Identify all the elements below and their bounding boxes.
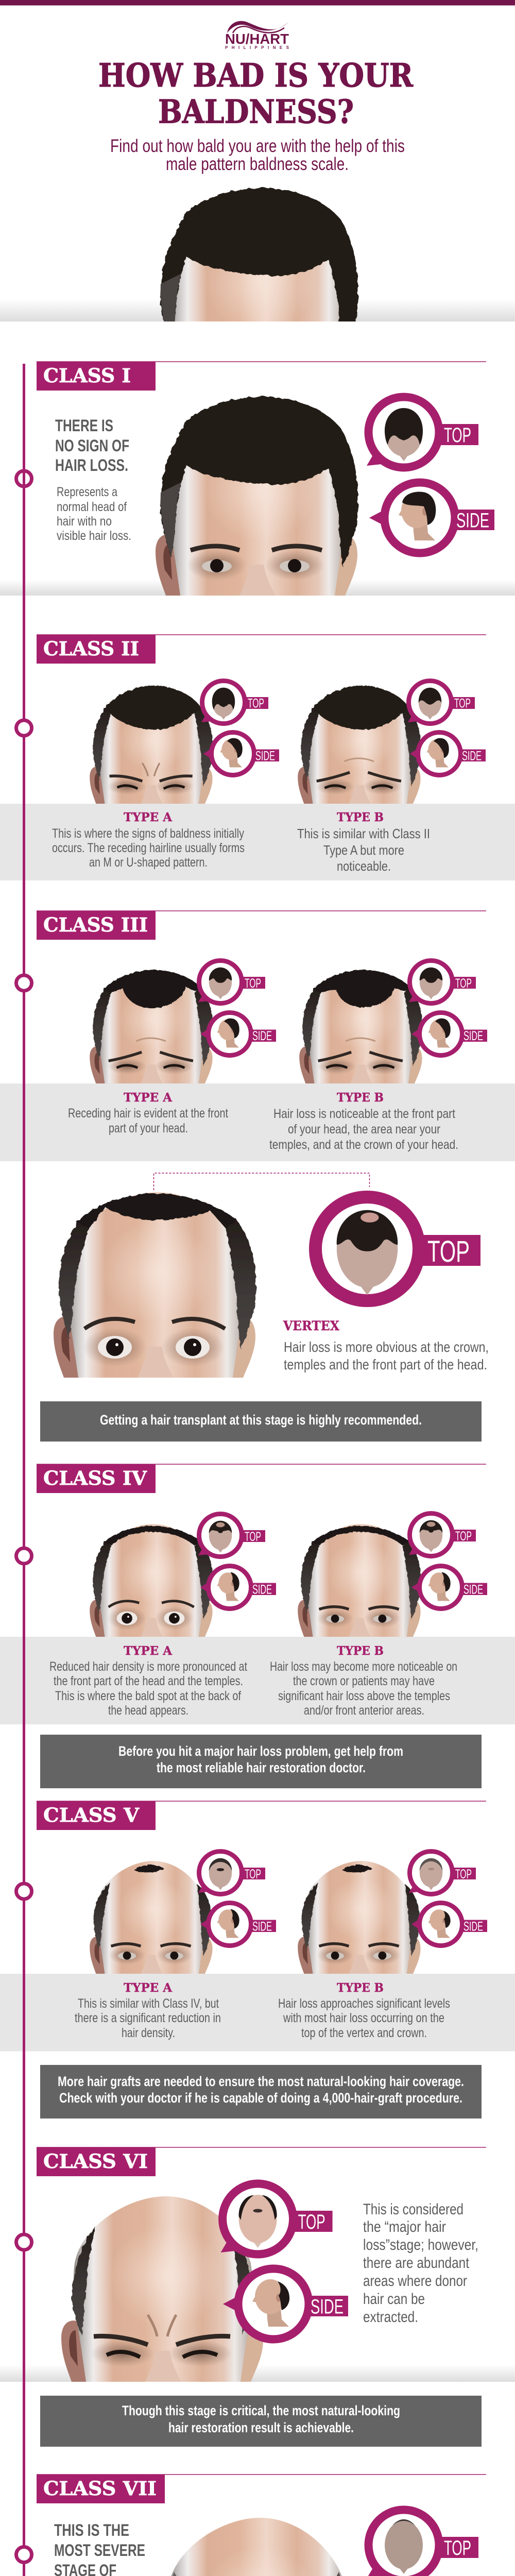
class VII text: MOST SEVERE bbox=[54, 2541, 145, 2560]
class V type B head bbox=[298, 1861, 421, 1974]
class VII head bbox=[0, 2518, 515, 2576]
logo: PHILIPPINES bbox=[225, 45, 289, 50]
class VII heading bbox=[37, 2475, 486, 2503]
class II type A text: TYPE A bbox=[124, 810, 173, 824]
class VII text bbox=[54, 2521, 145, 2576]
class II type A text: occurs. The receding hairline usually forms bbox=[52, 841, 245, 855]
class V type B text bbox=[278, 1981, 450, 2040]
panel: class III bbox=[0, 911, 515, 1442]
class V type B top callout bbox=[409, 1852, 476, 1894]
vertex text: VERTEX bbox=[283, 1318, 340, 1333]
vertex top callout: TOP bbox=[427, 1235, 470, 1268]
class IV advice bar bbox=[40, 1735, 482, 1788]
class VI top callout: TOP bbox=[298, 2211, 325, 2233]
class IV description band bbox=[0, 1637, 515, 1724]
class II type B text: Type A but more bbox=[323, 842, 404, 858]
class V type A top callout bbox=[198, 1852, 265, 1894]
vertex connector bracket bbox=[153, 1173, 370, 1190]
class VI advice bar: Though this stage is critical, the most natural-looking bbox=[122, 2403, 400, 2418]
class III type B text: of your head, the area near your bbox=[288, 1122, 440, 1137]
class II type B side callout bbox=[410, 733, 486, 775]
class I text: NO SIGN OF bbox=[55, 436, 129, 455]
class IV type A text: the head appears. bbox=[108, 1703, 188, 1718]
class III description band bbox=[0, 1083, 515, 1161]
hero: head with hair bbox=[0, 187, 515, 321]
class II description band bbox=[0, 804, 515, 880]
class IV type A top callout: TOP bbox=[245, 1530, 261, 1544]
class IV heading: CLASS IV bbox=[43, 1467, 147, 1489]
class V type A head bbox=[90, 1861, 213, 1974]
class IV type B top callout bbox=[409, 1514, 476, 1556]
class VI top callout bbox=[221, 2183, 333, 2255]
class IV type B side callout bbox=[411, 1566, 487, 1608]
class IV type A top callout bbox=[198, 1514, 265, 1557]
class V type A text bbox=[75, 1981, 221, 2040]
class III type B text: Hair loss is noticeable at the front part bbox=[273, 1107, 455, 1121]
class III type B text: temples, and at the crown of your head. bbox=[269, 1138, 458, 1152]
class V type B side callout: SIDE bbox=[464, 1920, 483, 1934]
class III type A text: Receding hair is evident at the front bbox=[68, 1106, 228, 1121]
class I heading bbox=[37, 362, 486, 391]
class V type B text: TYPE B bbox=[337, 1981, 384, 1995]
class VI side callout bbox=[223, 2269, 348, 2339]
class VI text: loss”stage; however, bbox=[363, 2236, 478, 2253]
class I side view callout bbox=[369, 482, 494, 553]
class V heading: CLASS V bbox=[43, 1804, 140, 1826]
vertex text bbox=[283, 1318, 489, 1372]
class II heading: CLASS II bbox=[43, 637, 139, 660]
class VI text bbox=[363, 2201, 478, 2326]
class V type A text: TYPE A bbox=[124, 1981, 173, 1995]
class V type A side callout: SIDE bbox=[252, 1920, 272, 1934]
class VI heading: CLASS VI bbox=[43, 2150, 148, 2173]
class I text bbox=[55, 416, 131, 543]
class VI advice bar: hair restoration result is achievable. bbox=[168, 2420, 354, 2435]
class II type B text: TYPE B bbox=[337, 810, 384, 824]
class V type B text: top of the vertex and crown. bbox=[301, 2026, 427, 2040]
vertex head bbox=[54, 1192, 256, 1378]
class II type B side callout: SIDE bbox=[462, 749, 482, 764]
class II type A head bbox=[90, 686, 213, 804]
class I heading: CLASS I bbox=[43, 364, 131, 387]
panel: class VII bbox=[0, 2475, 515, 2576]
panel: class V bbox=[0, 1801, 515, 2119]
class II type A top callout: TOP bbox=[248, 697, 264, 711]
class II type A text: an M or U-shaped pattern. bbox=[89, 855, 208, 870]
class IV type A text: Reduced hair density is more pronounced at bbox=[49, 1659, 247, 1674]
class III type A top callout bbox=[198, 960, 265, 1004]
class II heading bbox=[37, 635, 486, 664]
class III type A side callout bbox=[200, 1013, 276, 1055]
class II type B text bbox=[297, 810, 430, 874]
class III heading: CLASS III bbox=[43, 913, 148, 936]
class IV type B head bbox=[298, 1524, 421, 1637]
class IV type A text bbox=[49, 1644, 247, 1718]
class V advice bar bbox=[40, 2065, 482, 2119]
class VI text: there are abundant bbox=[363, 2255, 470, 2272]
subtitle: male pattern baldness scale. bbox=[166, 154, 349, 174]
class IV advice bar: the most reliable hair restoration doctor. bbox=[157, 1760, 366, 1775]
class I text: HAIR LOSS. bbox=[55, 456, 128, 474]
class V type A text: hair density. bbox=[122, 2026, 175, 2040]
class II type A side callout bbox=[203, 733, 279, 775]
top bar bbox=[0, 0, 515, 5]
class III type B top callout bbox=[409, 960, 476, 1004]
panel: class I bbox=[0, 362, 515, 596]
class IV type A side callout bbox=[200, 1566, 276, 1608]
class II type B head bbox=[298, 686, 421, 804]
class V type B text: Hair loss approaches significant levels bbox=[278, 1996, 450, 2011]
class IV type B text bbox=[270, 1644, 457, 1718]
class V heading bbox=[37, 1801, 486, 1830]
class III type B head bbox=[299, 970, 423, 1083]
panel: class II bbox=[0, 635, 515, 880]
class IV type B side callout: SIDE bbox=[464, 1583, 483, 1597]
class V type B side callout bbox=[411, 1903, 487, 1945]
class V description band bbox=[0, 1974, 515, 2052]
class III type B side callout bbox=[411, 1013, 487, 1055]
class VII top callout: TOP bbox=[444, 2537, 471, 2560]
class II type A side callout: SIDE bbox=[255, 749, 275, 764]
class IV advice bar: Before you hit a major hair loss problem, get help from bbox=[118, 1743, 403, 1759]
class II type B top callout: TOP bbox=[454, 697, 471, 711]
title bbox=[98, 56, 414, 131]
class III type A text: TYPE A bbox=[124, 1091, 173, 1105]
class VI text: areas where donor bbox=[363, 2273, 467, 2290]
class IV type A head bbox=[90, 1524, 213, 1637]
class VII text: THIS IS THE bbox=[54, 2521, 129, 2539]
logo: NU/HART bbox=[225, 31, 289, 47]
class III type A top callout: TOP bbox=[245, 976, 261, 991]
class III recommendation bar bbox=[40, 1401, 482, 1442]
class I text: Represents a bbox=[57, 485, 117, 499]
class IV type A side callout: SIDE bbox=[252, 1583, 272, 1597]
class VI heading bbox=[37, 2147, 486, 2176]
logo bbox=[225, 21, 289, 50]
class IV type B text: Hair loss may become more noticeable on bbox=[270, 1659, 457, 1674]
class III heading bbox=[37, 911, 486, 940]
class II type B text: This is similar with Class II bbox=[297, 826, 430, 841]
class IV heading bbox=[37, 1464, 486, 1493]
class III type A text bbox=[68, 1091, 228, 1136]
class IV type B text: significant hair loss above the temples bbox=[278, 1689, 450, 1703]
class VI text: This is considered bbox=[363, 2201, 464, 2218]
class III type B side callout: SIDE bbox=[464, 1029, 483, 1043]
class VII heading: CLASS VII bbox=[43, 2477, 157, 2500]
panel: class IV bbox=[0, 1464, 515, 1788]
class III type A side callout: SIDE bbox=[252, 1029, 272, 1043]
class V type A top callout: TOP bbox=[245, 1867, 261, 1882]
class III type A text: part of your head. bbox=[109, 1121, 188, 1136]
class III type B text bbox=[269, 1091, 458, 1152]
class I top view callout bbox=[367, 397, 478, 468]
class I text: hair with no bbox=[57, 514, 112, 529]
class IV type A text: TYPE A bbox=[124, 1644, 173, 1658]
subtitle bbox=[110, 136, 405, 174]
class IV type A text: the front part of the head and the temples. bbox=[54, 1674, 243, 1688]
class IV type A text: This is where the bald spot at the back of bbox=[55, 1689, 241, 1703]
class IV type B text: TYPE B bbox=[337, 1644, 384, 1658]
class III type A head bbox=[90, 970, 213, 1083]
class V type B text: with most hair loss occurring on the bbox=[283, 2011, 444, 2025]
class II type A text bbox=[52, 810, 245, 870]
class II type B top callout bbox=[408, 681, 475, 723]
vertex top callout bbox=[315, 1197, 480, 1300]
class II type B text: noticeable. bbox=[337, 858, 391, 874]
timeline with class markers bbox=[16, 364, 32, 2576]
subtitle: Find out how bald you are with the help of this bbox=[110, 136, 405, 156]
class IV type B top callout: TOP bbox=[455, 1529, 472, 1544]
title: BALDNESS? bbox=[158, 93, 354, 131]
class VI text: the “major hair bbox=[363, 2218, 446, 2235]
class I text: THERE IS bbox=[55, 416, 113, 435]
panel: class VI bbox=[0, 2147, 515, 2447]
class V type A text: there is a significant reduction in bbox=[75, 2011, 221, 2025]
class I head bbox=[0, 396, 515, 596]
title: HOW BAD IS YOUR bbox=[98, 56, 414, 94]
class V type A side callout bbox=[200, 1903, 276, 1945]
class III type B top callout: TOP bbox=[455, 976, 472, 991]
class IV type B text: and/or front anterior areas. bbox=[304, 1703, 424, 1718]
class V type B top callout: TOP bbox=[455, 1867, 472, 1882]
class II type A text: This is where the signs of baldness initially bbox=[52, 826, 244, 841]
class I side view callout: SIDE bbox=[456, 509, 489, 532]
class VI head bbox=[0, 2196, 515, 2382]
class VI text: hair can be bbox=[363, 2291, 425, 2308]
class I top view callout: TOP bbox=[444, 424, 471, 447]
class III type B text: TYPE B bbox=[337, 1091, 384, 1105]
class III recommendation bar: Getting a hair transplant at this stage is highly recommended. bbox=[100, 1412, 422, 1428]
class VI text: extracted. bbox=[363, 2309, 418, 2326]
class VI side callout: SIDE bbox=[311, 2296, 344, 2318]
class VII top callout bbox=[367, 2510, 478, 2576]
class VI advice bar bbox=[40, 2396, 482, 2447]
class V type A text: This is similar with Class IV, but bbox=[78, 1996, 219, 2011]
class II type A top callout bbox=[201, 681, 268, 723]
class IV type B text: the crown or patients may have bbox=[293, 1674, 435, 1688]
class I text: normal head of bbox=[57, 500, 127, 514]
class I text: visible hair loss. bbox=[57, 529, 131, 543]
